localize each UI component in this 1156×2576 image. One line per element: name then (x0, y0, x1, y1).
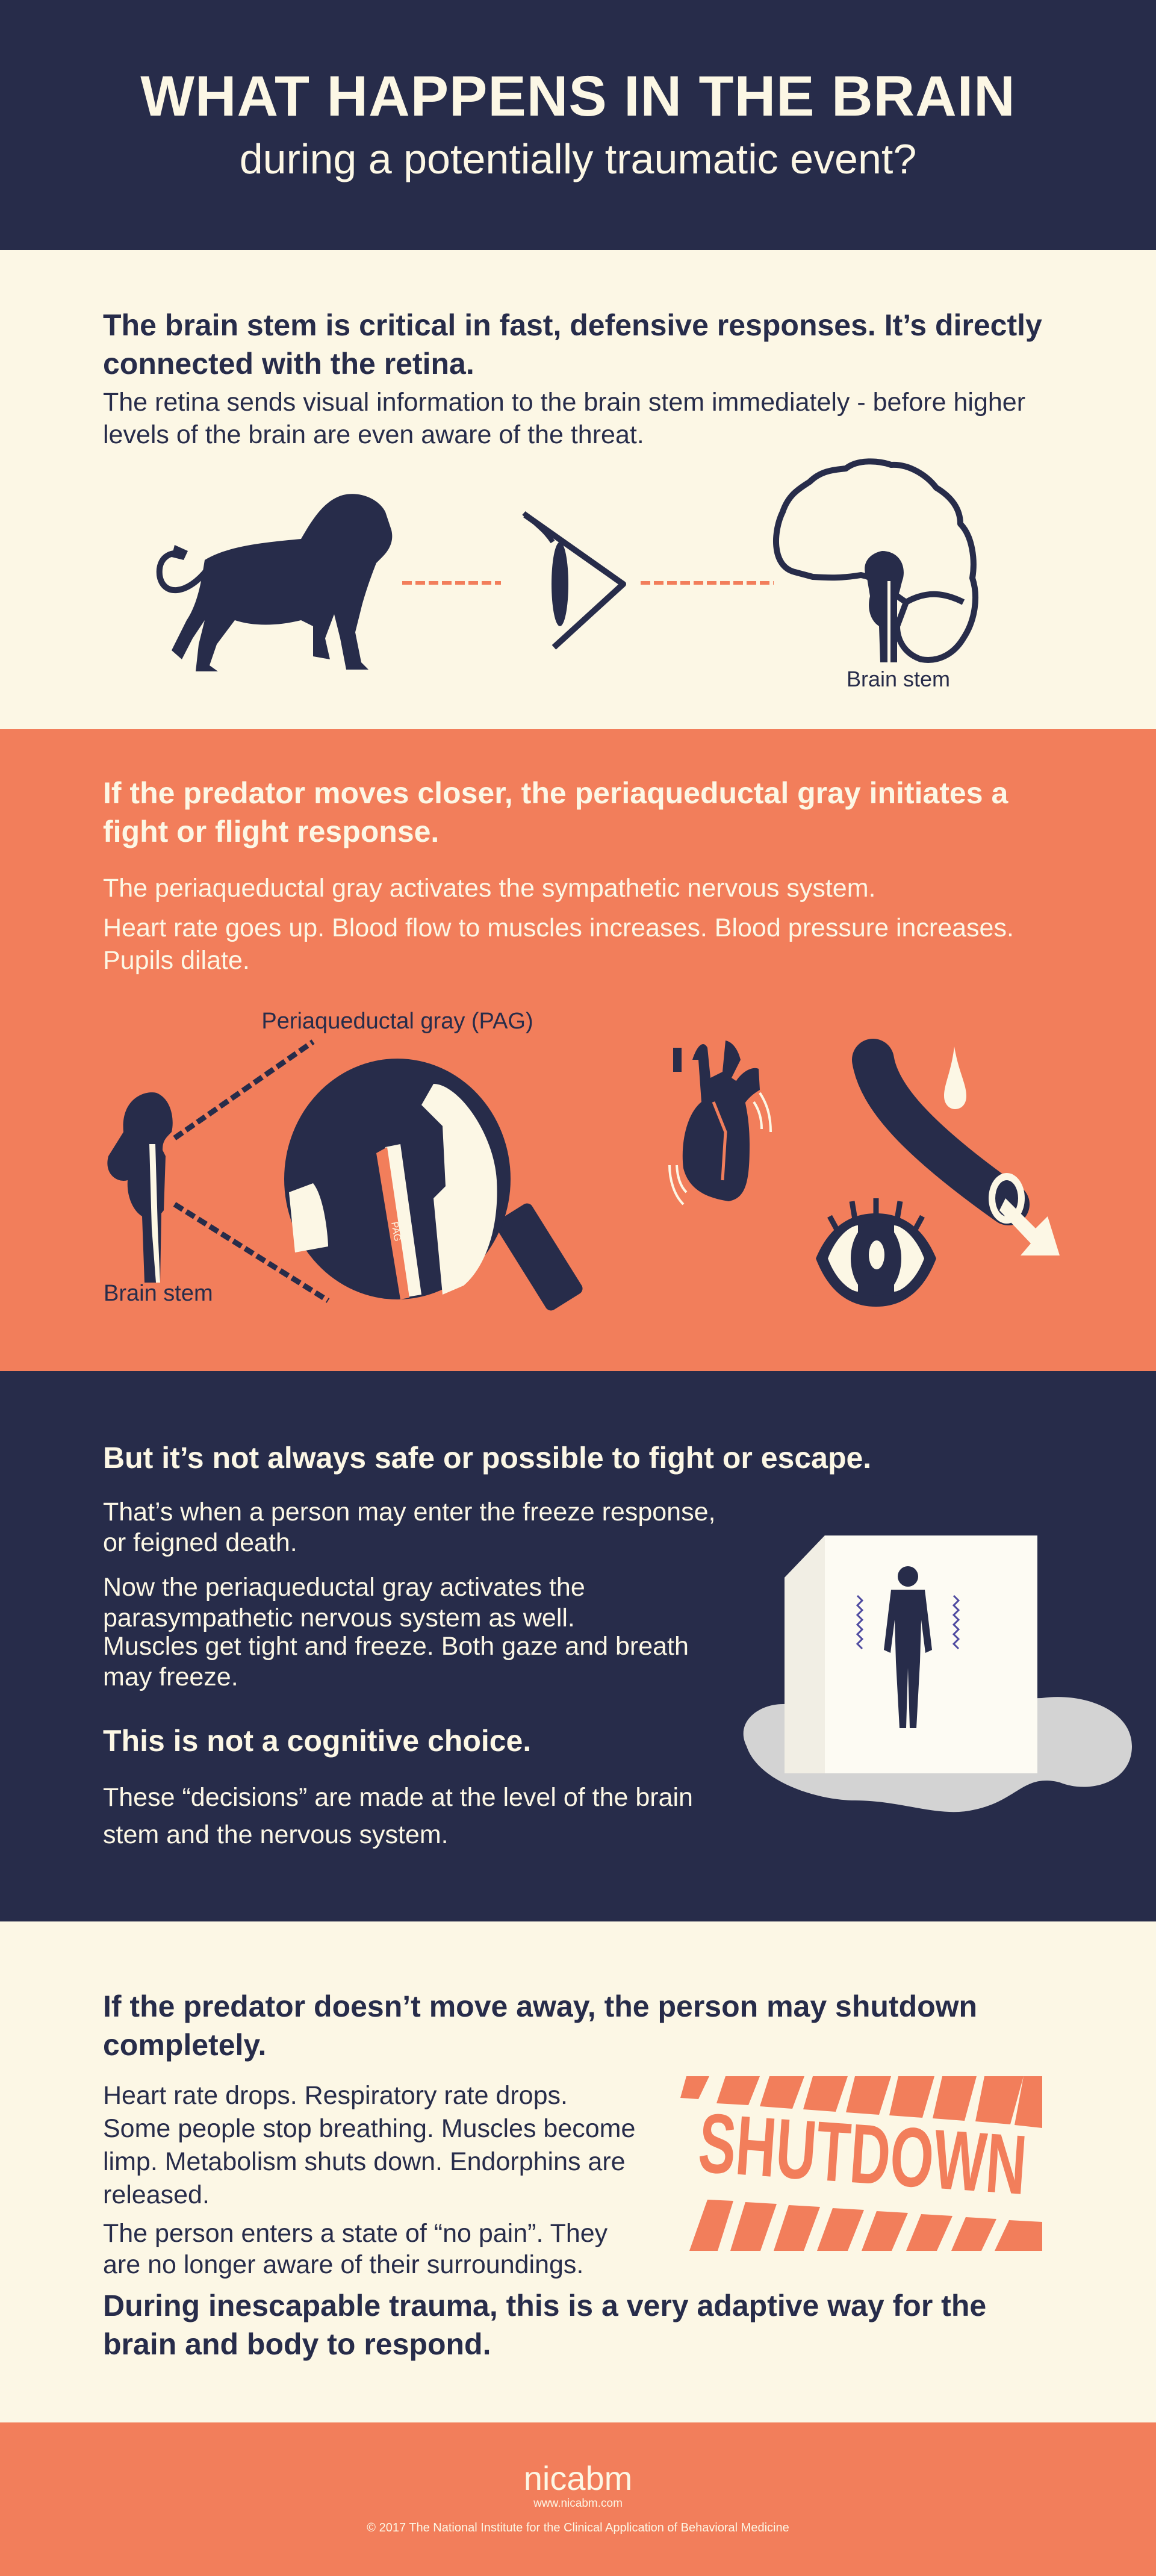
arrow: dashed line eye to brain (641, 581, 774, 585)
body text 3b (103, 1573, 585, 1632)
body text 1: levels of the brain are even aware of the threat. (103, 420, 644, 449)
body text 3c: Muscles get tight and freeze. Both gaze and breath (103, 1632, 689, 1661)
body text 3: That’s when a person may enter the freeze response, (103, 1498, 715, 1526)
body text 4: limp. Metabolism shuts down. Endorphins are (103, 2147, 626, 2176)
body text 1: The retina sends visual information to the brain stem immediately - before higher (103, 388, 1025, 417)
body text 4: Some people stop breathing. Muscles become (103, 2114, 635, 2143)
heading 4: completely. (103, 2028, 266, 2062)
body text 3: or feigned death. (103, 1528, 297, 1557)
copyright: © 2017 The National Institute for the Clinical Application of Behavioral Medicine (367, 2521, 789, 2534)
icon: blood vessel with arrow (873, 1060, 1060, 1255)
heading 4b: During inescapable trauma, this is a very adaptive way for the (103, 2289, 986, 2322)
body text 4b: The person enters a state of “no pain”. They (103, 2219, 608, 2248)
heading 4: If the predator doesn’t move away, the person may shutdown (103, 1990, 977, 2023)
icon: magnifier with PAG: PAG (389, 1221, 402, 1242)
body text 2b: Heart rate goes up. Blood flow to muscles increases. Blood pressure increases. (103, 913, 1014, 942)
heading 4b (103, 2289, 986, 2361)
body text 4b (103, 2219, 608, 2279)
website: www.nicabm.com (533, 2497, 623, 2510)
icon: eye (524, 513, 623, 647)
body text 4: Heart rate drops. Respiratory rate drops. (103, 2081, 568, 2110)
heading 4 (103, 1990, 977, 2062)
body text 3b: Now the periaqueductal gray activates the (103, 1573, 585, 1602)
icon: brain with brain stem (776, 461, 975, 662)
heading 3: But it’s not always safe or possible to fight or escape. (103, 1441, 871, 1475)
body text 2b (103, 913, 1014, 975)
body text 4: released. (103, 2180, 210, 2209)
heading 4b: brain and body to respond. (103, 2327, 491, 2361)
illustration: lion, eye, brain (157, 458, 979, 691)
arrow: dashed line lion to eye (402, 581, 501, 585)
body text 3c (103, 1632, 689, 1691)
icon: frozen person in ice block (744, 1535, 1132, 1812)
title: WHAT HAPPENS IN THE BRAIN (140, 64, 1016, 128)
body text 3d: stem and the nervous system. (103, 1820, 449, 1849)
panel: freeze response (0, 1371, 1156, 1921)
body text 4b: are no longer aware of their surroundings. (103, 2250, 583, 2279)
body text 3b: parasympathetic nervous system as well. (103, 1604, 575, 1632)
heading 2 (103, 776, 1008, 848)
footer (0, 2422, 1156, 2576)
header (0, 0, 1156, 250)
body text 1 (103, 388, 1025, 449)
body text 3d: These “decisions” are made at the level of the brain (103, 1783, 693, 1812)
body text 3d (103, 1783, 693, 1849)
heading 1: The brain stem is critical in fast, defensive responses. It’s directly (103, 308, 1042, 342)
icon: blood drop (944, 1047, 966, 1109)
heading 1: connected with the retina. (103, 347, 474, 381)
body text 3 (103, 1498, 715, 1557)
arrow: dashed zoom lines (175, 1042, 328, 1301)
icon: heart (670, 1041, 771, 1204)
icon: magnifier with PAG (284, 1059, 585, 1313)
body text 4 (103, 2081, 635, 2209)
label: brain stem: Brain stem (847, 667, 950, 691)
subtitle: during a potentially traumatic event? (240, 135, 916, 182)
heading 1 (103, 308, 1042, 381)
icon: lion (160, 494, 392, 671)
heading 3b: This is not a cognitive choice. (103, 1724, 531, 1758)
panel: shutdown (0, 1921, 1156, 2422)
heading 2: fight or flight response. (103, 815, 439, 848)
logo: nicabm: nicabm (524, 2459, 632, 2497)
panel: fight or flight (0, 729, 1156, 1371)
body text 2: The periaqueductal gray activates the sympathetic nervous system. (103, 874, 875, 903)
body text 2b: Pupils dilate. (103, 946, 250, 975)
icon: eye with dilated pupil (816, 1198, 936, 1307)
label: brain stem: Brain stem (104, 1281, 213, 1306)
icon: shutdown stamp (680, 2076, 1042, 2251)
icon: small brain stem (107, 1092, 173, 1283)
body text 3c: may freeze. (103, 1663, 238, 1691)
panel: brain stem and retina (0, 250, 1156, 729)
heading 2: If the predator moves closer, the periaqueductal gray initiates a (103, 776, 1008, 810)
label: PAG: Periaqueductal gray (PAG) (261, 1009, 533, 1034)
